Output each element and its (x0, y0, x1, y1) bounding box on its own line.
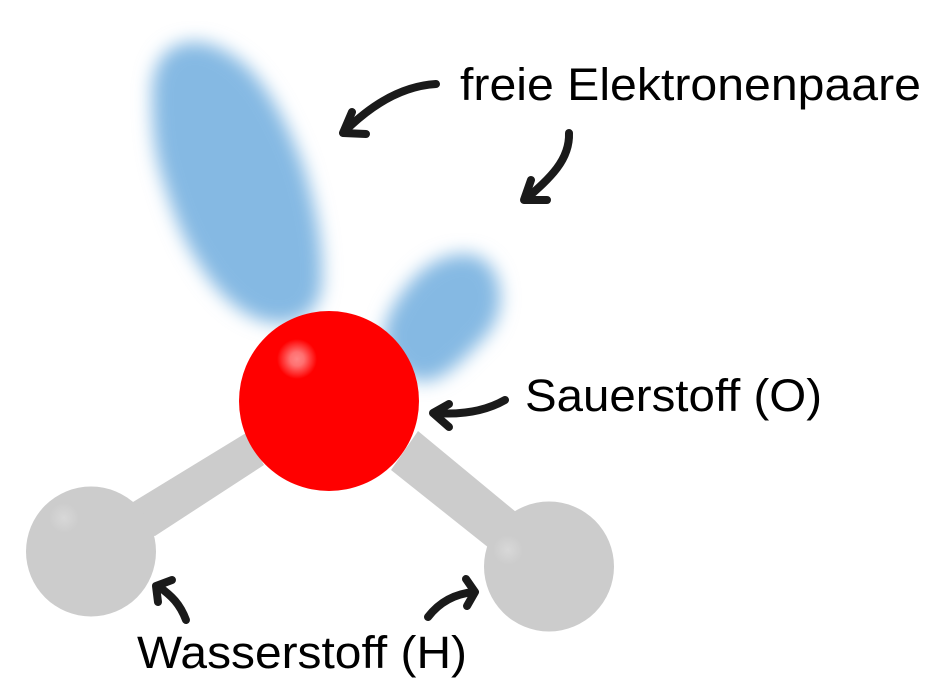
label: lone pairs: freie Elektronenpaare (460, 59, 921, 110)
lone pair lobe: small (384, 254, 500, 381)
lone pair lobe: large (152, 42, 322, 323)
arrow: to right hydrogen (428, 579, 475, 617)
label: oxygen: Sauerstoff (O) (525, 370, 822, 421)
arrow: to large lobe (343, 84, 436, 134)
arrow: to small lobe (524, 133, 569, 200)
bond: left (120, 433, 264, 536)
bond: right (391, 431, 530, 548)
hydrogen atom: right (484, 502, 614, 632)
arrow: to oxygen (433, 400, 505, 427)
arrow: to left hydrogen (156, 580, 186, 620)
hydrogen atom: left (26, 486, 156, 616)
oxygen atom (239, 311, 419, 491)
label: hydrogen: Wasserstoff (H) (137, 627, 467, 678)
